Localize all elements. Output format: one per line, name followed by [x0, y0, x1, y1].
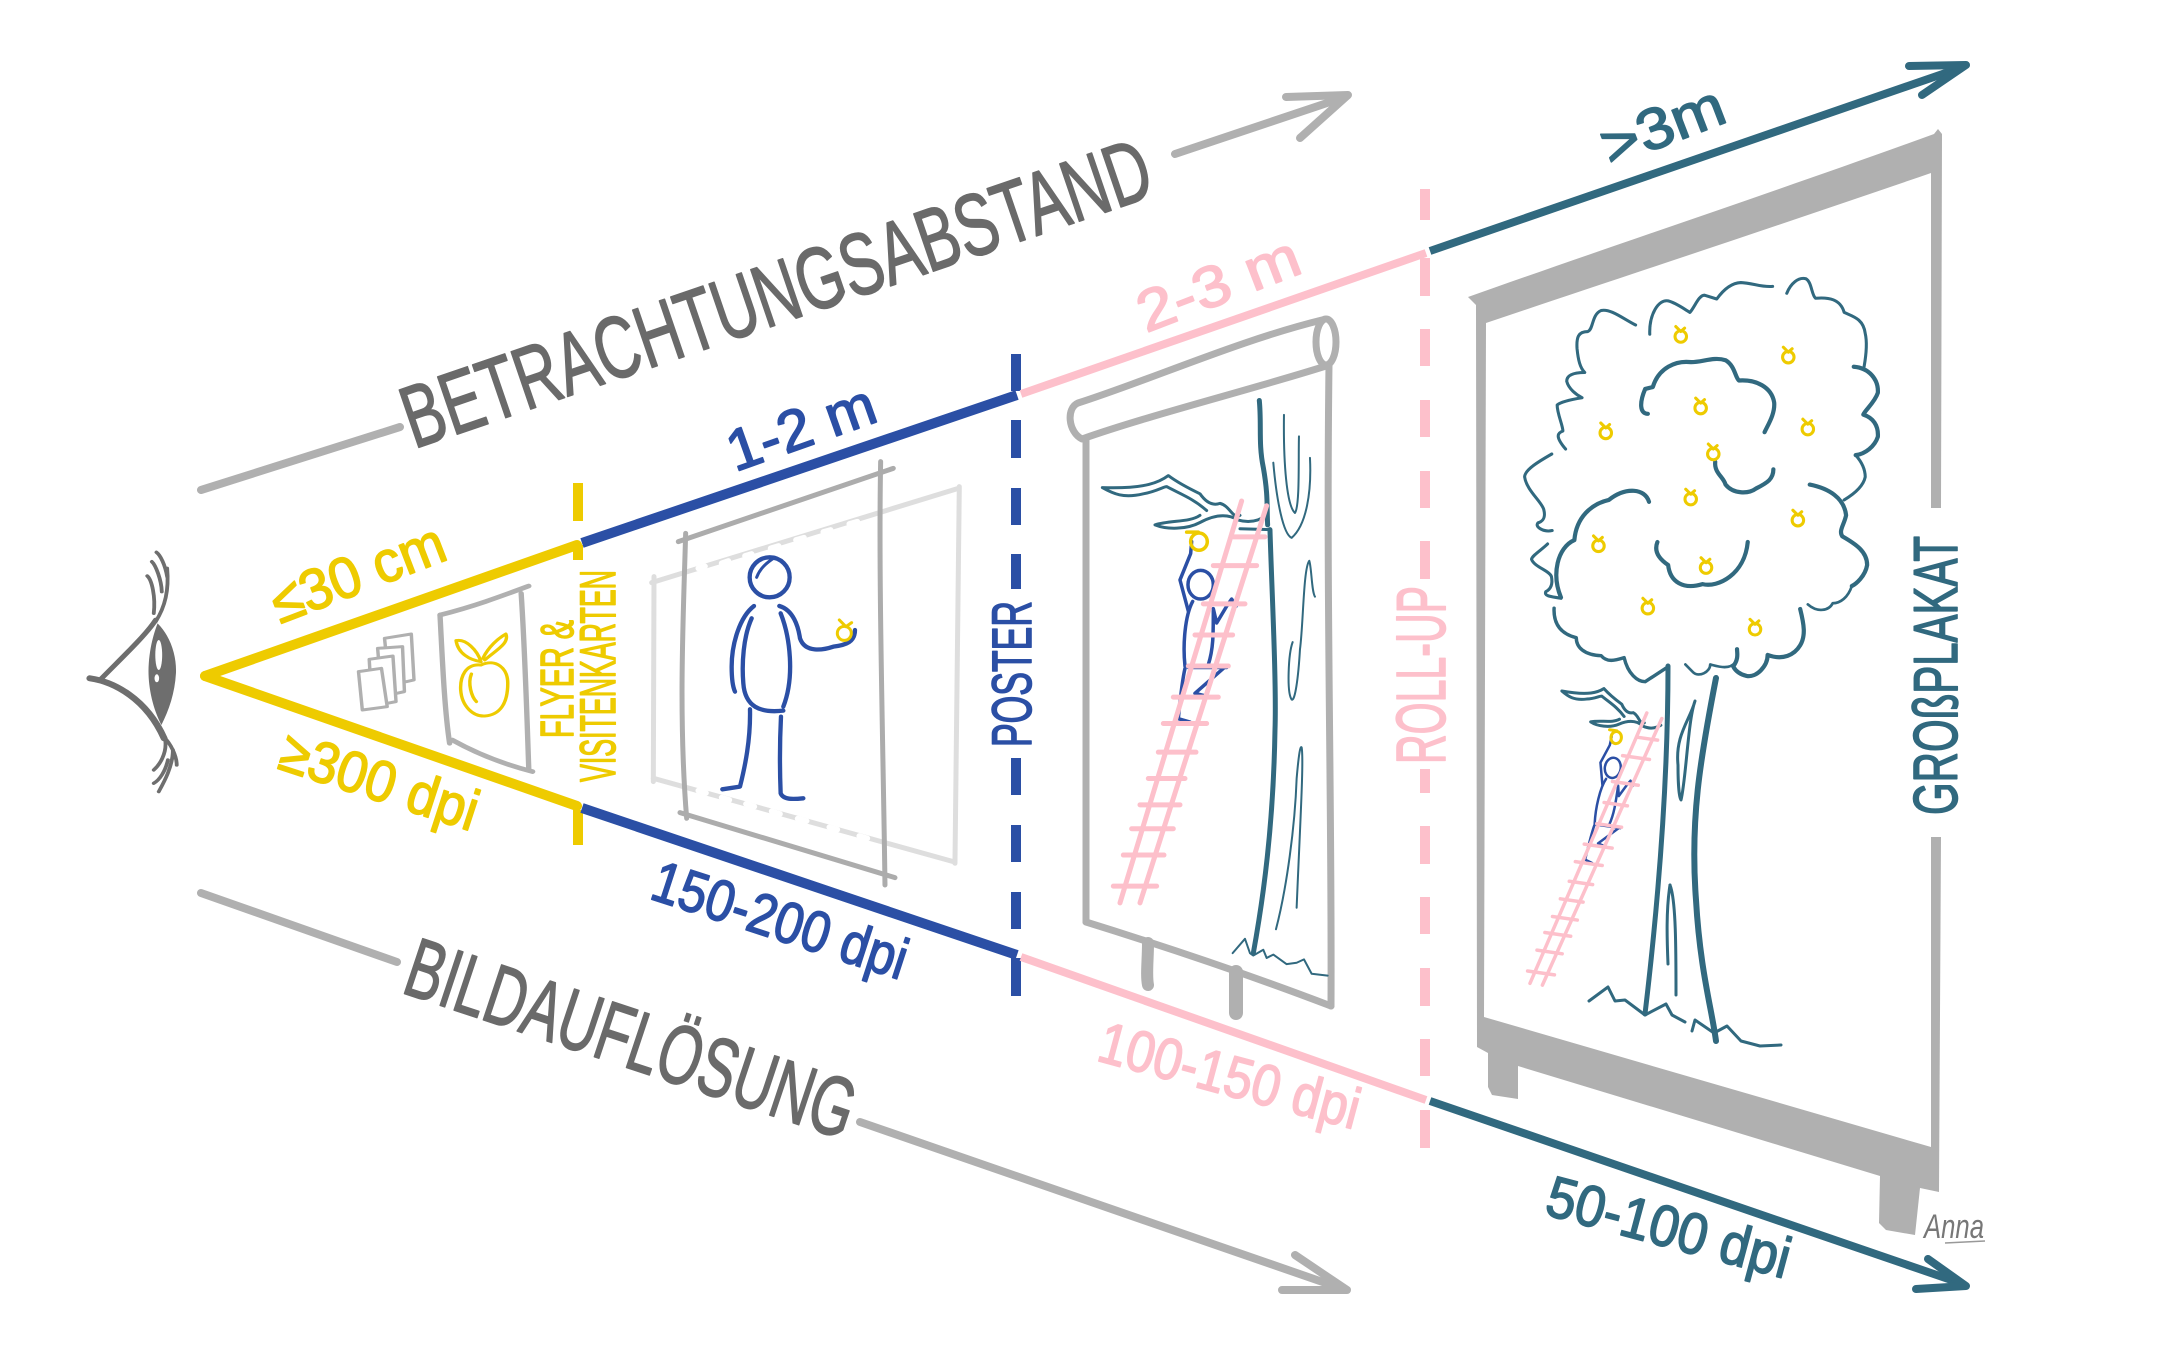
- illustration: apple tree canopy: [1525, 278, 1878, 686]
- label: resolution billboard: 50-100 dpi: [1540, 1164, 1798, 1291]
- illustration: tree trunk and ground on billboard: [1589, 666, 1781, 1046]
- heading: Betrachtungsabstand: BETRACHTUNGSABSTAND: [388, 119, 1164, 467]
- illustration: climber and ladder on billboard: [1519, 683, 1665, 997]
- segment: yellow viewing cone: [205, 483, 578, 845]
- label: poster: POSTER: [980, 601, 1043, 747]
- signature: Anna: [1922, 1208, 1984, 1246]
- label: roll-up: ROLL-UP: [1382, 586, 1460, 764]
- heading: Bildaufloesung: BILDAUFLÖSUNG: [394, 920, 868, 1157]
- label: resolution flyer: ≥300 dpi: [272, 719, 487, 844]
- arrow: Betrachtungsabstand axis: [201, 95, 1348, 490]
- label: flyer und visitenkarten: FLYER &: [531, 620, 583, 738]
- label: resolution roll-up: 100-150 dpi: [1092, 1010, 1367, 1142]
- segment: teal large-format lines: [1430, 65, 1966, 1289]
- label: viewing distance poster: 1-2 m: [718, 372, 885, 484]
- label: viewing distance billboard: >3m: [1591, 73, 1734, 179]
- illustration: person in front of poster frames: [652, 462, 959, 885]
- icon: eye: [90, 552, 177, 792]
- label: viewing distance roll-up: 2-3 m: [1127, 224, 1309, 345]
- label: resolution poster: 150-200 dpi: [644, 849, 916, 992]
- illustration: roll-up banner frame: [1070, 319, 1336, 1013]
- label: flyer und visitenkarten: [531, 570, 626, 782]
- label: viewing distance flyer: ≤30 cm: [261, 510, 455, 636]
- illustration: tree and climber on roll-up: [1102, 400, 1328, 976]
- illustration: billboard frame: [1468, 129, 1942, 1235]
- segment: pink roll-up lines: [1021, 189, 1426, 1148]
- icon: flyer stack and framed apple: [359, 586, 533, 772]
- label: flyer und visitenkarten: VISITENKARTEN: [570, 570, 626, 782]
- arrow: Bildaufloesung axis: [201, 893, 1347, 1290]
- label: grossplakat: GROßPLAKAT: [1902, 536, 1971, 815]
- segment: blue poster lines: [582, 354, 1017, 996]
